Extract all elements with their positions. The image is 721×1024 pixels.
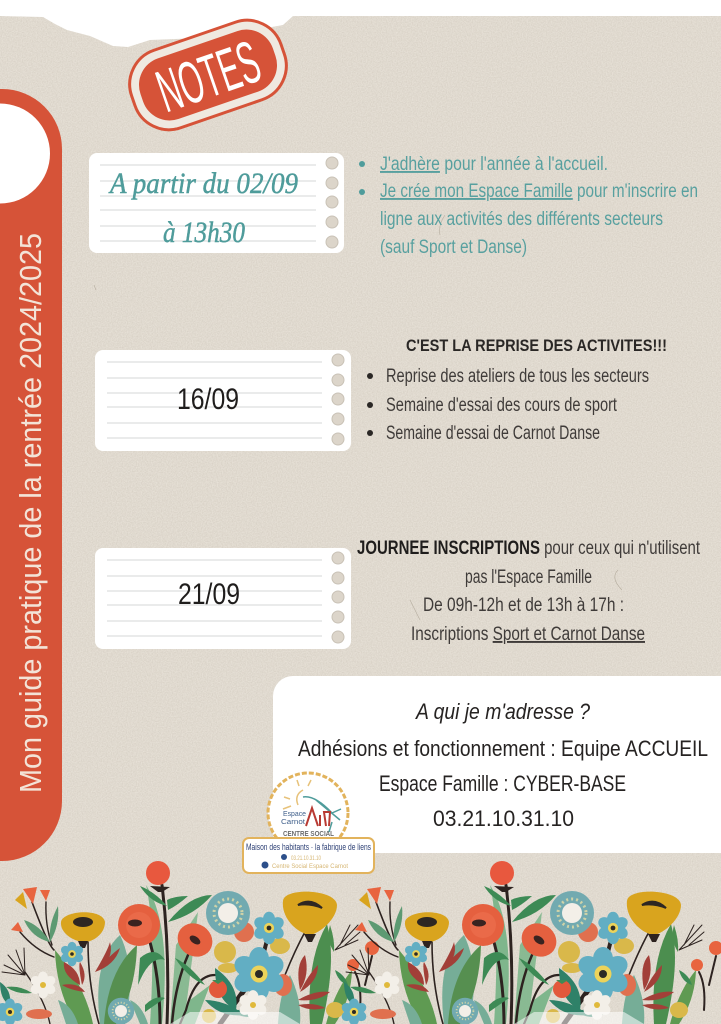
section 2 bullet list: Semaine d'essai de Carnot Danse	[386, 423, 600, 444]
section 2 bullet list: Semaine d'essai des cours de sport	[386, 395, 618, 416]
section 1 bullet list	[359, 154, 698, 258]
note card 3	[95, 548, 351, 649]
card 1 time text: à 13h30	[163, 216, 245, 249]
contact panel	[273, 676, 721, 853]
section 1 bullet list: J'adhère pour l'année à l'accueil.	[380, 154, 608, 175]
card 1 date text: A partir du 02/09	[108, 167, 298, 200]
section 1 bullet list: (sauf Sport et Danse)	[380, 237, 527, 258]
centre social logo	[243, 773, 374, 873]
tab punch hole	[0, 104, 50, 204]
vertical guide title: Mon guide pratique de la rentrée 2024/2025	[13, 233, 48, 793]
centre social logo: Espace	[283, 811, 306, 818]
side tab	[0, 89, 62, 861]
section 1 bullet list: Je crée mon Espace Famille pour m'inscrire en	[380, 181, 698, 202]
centre social logo: 03.21.10.31.10	[291, 856, 321, 862]
centre social logo: Carnot	[281, 819, 305, 826]
contact espace famille: Espace Famille : CYBER-BASE	[379, 771, 626, 796]
notes badge	[120, 11, 296, 139]
contact question: A qui je m'adresse ?	[414, 699, 591, 724]
section 3 text block	[357, 538, 701, 645]
section 3 text block: Inscriptions Sport et Carnot Danse	[411, 624, 645, 645]
section 3 text block: pas l'Espace Famille	[465, 567, 592, 588]
card 3 date: 21/09	[178, 578, 240, 611]
flower meadow	[0, 861, 721, 1024]
torn paper top edge	[0, 0, 721, 47]
section 1 bullet list: ligne aux activités des différents secteurs	[380, 209, 663, 230]
centre social logo: Maison des habitants · la fabrique de liens	[246, 842, 371, 852]
centre social logo: Centre Social Espace Carnot	[272, 864, 348, 870]
contact phone: 03.21.10.31.10	[433, 806, 574, 831]
section 3 text block: De 09h-12h et de 13h à 17h :	[423, 595, 624, 616]
section 2 bullet list: Reprise des ateliers de tous les secteurs	[386, 366, 649, 387]
note card 1	[89, 153, 344, 253]
card 2 date: 16/09	[177, 383, 239, 416]
section 2 bullet list	[367, 366, 649, 444]
note card 2	[95, 350, 351, 451]
section 2 heading: C'EST LA REPRISE DES ACTIVITES!!!	[406, 336, 667, 355]
centre social logo: CENTRE SOCIAL	[283, 831, 335, 838]
